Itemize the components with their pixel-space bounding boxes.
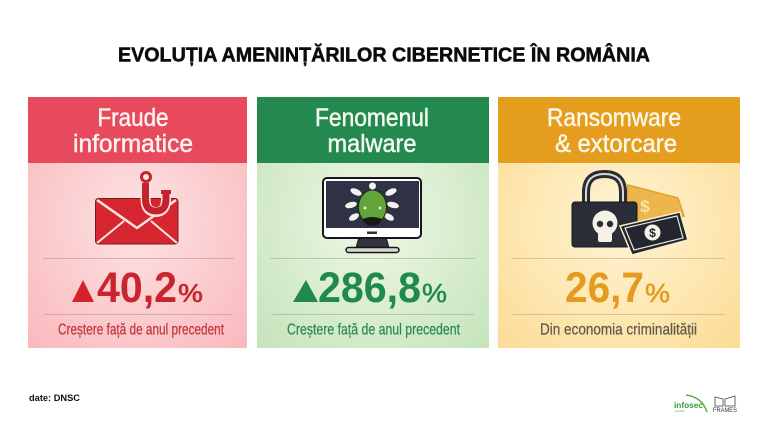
- panel header: fenomenul malware: [257, 97, 489, 163]
- panel header: fenomenul malware: malware: [328, 130, 416, 158]
- panel header: ransomware si extorcare: [498, 97, 740, 163]
- logo: frames: [713, 396, 737, 414]
- logo: infosec: [674, 395, 707, 413]
- logo: infosec: council: [675, 409, 685, 413]
- title: EVOLUȚIA AMENINȚĂRILOR CIBERNETICE ÎN ROMÂNIA: [118, 42, 650, 66]
- panel header: fraude informatice: Fraude: [98, 104, 168, 132]
- icon: infected monitor: [323, 178, 421, 252]
- statistic: 40,2%: [72, 264, 203, 312]
- panel header: fraude informatice: informatice: [73, 130, 193, 158]
- icon: padlock, skull and money: [572, 174, 688, 255]
- caption: Creștere față de anul precedent: [58, 322, 224, 338]
- statistic: 286,8%: %: [422, 278, 447, 308]
- statistic: 26,7%: %: [645, 278, 670, 308]
- panel: ransomware si extorcare: [498, 97, 740, 348]
- caption: Din economia criminalității: [540, 322, 697, 338]
- divider top: [512, 258, 725, 260]
- divider bottom: [271, 314, 474, 316]
- panel header: ransomware si extorcare: Ransomware: [547, 104, 681, 132]
- divider bottom: [44, 314, 233, 316]
- logo: infosec: infosec: [674, 401, 704, 410]
- panel header: fenomenul malware: Fenomenul: [315, 104, 429, 132]
- source note: date: DNSC: [29, 393, 81, 403]
- statistic: 286,8%: 286,8: [318, 264, 421, 312]
- statistic: 286,8%: [293, 264, 447, 312]
- panel: fenomenul malware: [257, 97, 489, 348]
- statistic: 26,7%: 26,7: [565, 264, 644, 312]
- statistic: 40,2%: 40,2: [97, 264, 177, 312]
- icon: phishing envelope: [96, 172, 178, 244]
- panel header: fraude informatice: [28, 97, 247, 163]
- icon: padlock, skull and money: $: [649, 226, 656, 240]
- caption: Creștere față de anul precedent: [287, 322, 460, 338]
- statistic: 40,2%: %: [178, 278, 203, 308]
- icon: padlock, skull and money: $: [640, 197, 650, 216]
- logo: frames: FRAMES: [713, 408, 737, 414]
- divider bottom: [512, 314, 725, 316]
- divider top: [270, 258, 475, 260]
- divider top: [43, 258, 234, 260]
- panel header: ransomware si extorcare: & extorcare: [555, 130, 677, 158]
- panel: fraude informatice: [28, 97, 247, 348]
